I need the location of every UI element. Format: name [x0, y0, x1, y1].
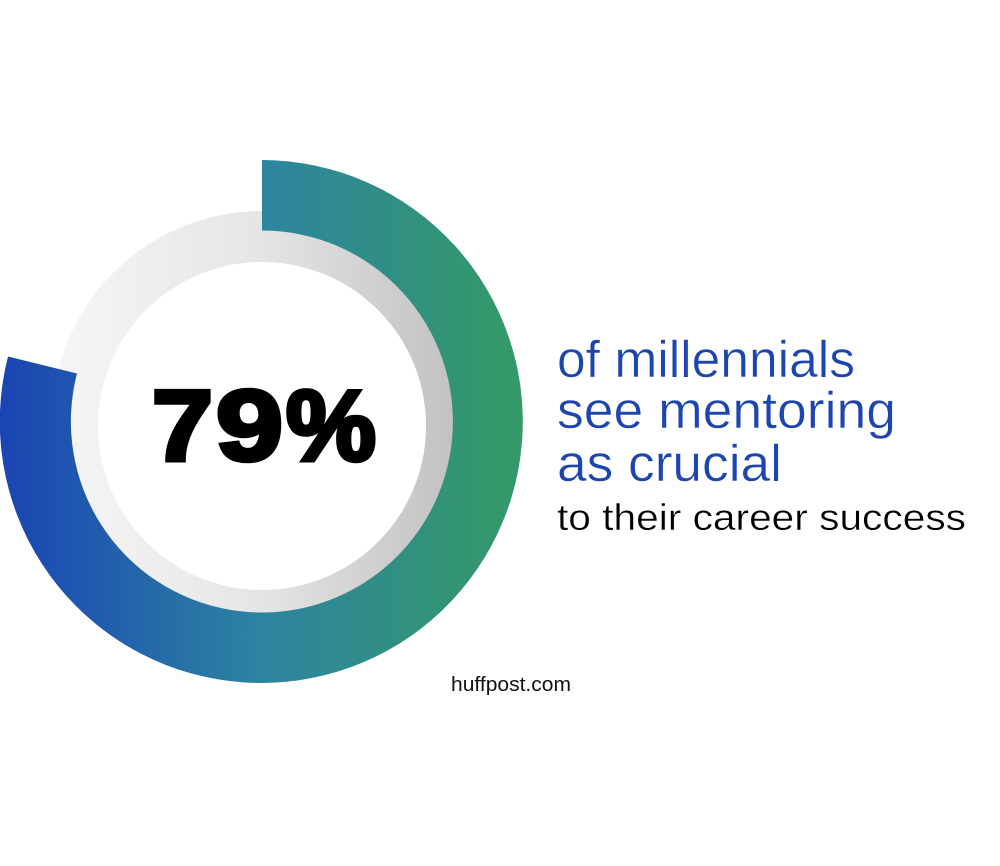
donut chart: 79% — [0, 160, 523, 683]
big percentage — [152, 370, 376, 482]
background ring — [52, 211, 472, 631]
big percentage: % — [286, 370, 376, 482]
big percentage: 7 — [152, 370, 213, 482]
highlight line 3: as crucial — [557, 435, 782, 493]
statement text — [557, 331, 966, 538]
highlight line 1: of millennials — [557, 331, 855, 389]
progress arc — [0, 160, 523, 683]
source: huffpost.com — [451, 674, 571, 696]
highlight line 2: see mentoring — [557, 382, 896, 440]
big percentage: 9 — [216, 370, 283, 482]
closing line: to their career success — [557, 497, 966, 538]
